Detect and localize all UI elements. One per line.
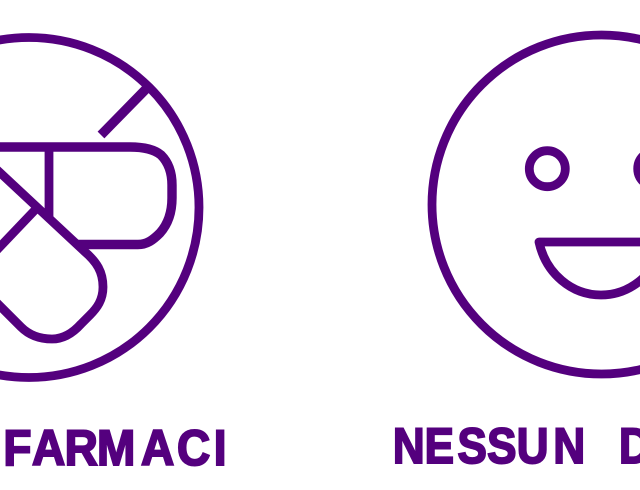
icon ring <box>0 38 199 378</box>
label: farmaci: FARMACI <box>3 421 227 476</box>
capsule divider <box>45 147 53 217</box>
lower capsule divider <box>0 210 35 253</box>
slash through icon <box>101 87 148 135</box>
face outline <box>432 35 640 374</box>
icon: smiling face <box>432 35 640 374</box>
lower capsule <box>0 167 103 339</box>
horizontal capsule <box>0 147 172 244</box>
open mouth <box>539 242 640 295</box>
right eye <box>638 151 640 187</box>
left eye <box>529 151 565 187</box>
icon: no drugs crossed-out capsules <box>0 38 199 378</box>
